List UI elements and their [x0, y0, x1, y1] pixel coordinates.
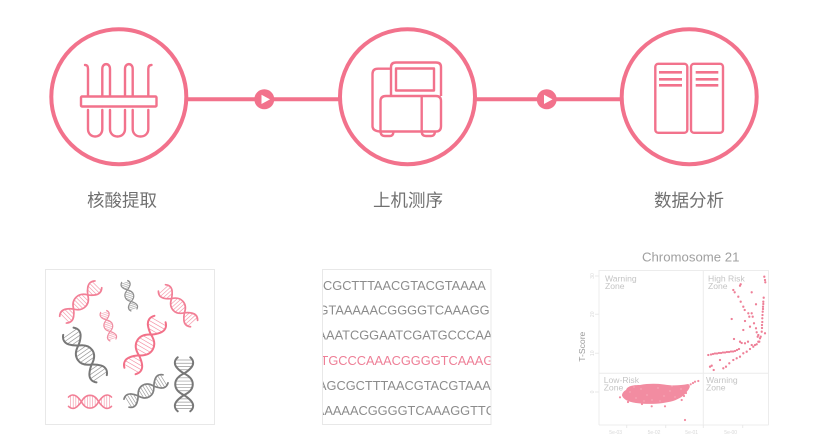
- chart frame and quadrant dividers: [599, 270, 768, 425]
- icon: test tubes in rack: [81, 64, 156, 136]
- connector line: sequencing to analysis: [475, 97, 622, 101]
- x axis tick labels: [609, 430, 737, 436]
- y axis title: T-Score: [577, 331, 587, 362]
- helix: pink upper right: [157, 283, 199, 328]
- x axis tick labels: 5e-02: [648, 430, 661, 436]
- panel: DNA sequence reads: [316, 270, 495, 424]
- step 1 label: 核酸提取: [87, 190, 157, 210]
- helix: gray small top: [120, 280, 138, 311]
- sequence text lines: AAATCGGAATCGATGCCCAA: [318, 328, 493, 342]
- play marker 2: [537, 89, 557, 109]
- sequence text lines: AGCGCTTTAACGTACGTAAA: [318, 378, 491, 393]
- low-risk point cloud: [620, 381, 698, 420]
- sequence text lines: [323, 281, 490, 415]
- x axis tick labels: 5e-01: [685, 430, 698, 436]
- chart title: Chromosome 21: [642, 250, 739, 264]
- zone label: low risk: Zone: [604, 382, 624, 392]
- zone label: high risk: Zone: [708, 281, 728, 291]
- scatter chart: T-score risk zones: [577, 270, 768, 436]
- zone label: warning bottom right: Zone: [706, 382, 726, 392]
- x axis tick labels: 5e-00: [724, 430, 737, 436]
- zone label: warning top left: Zone: [605, 281, 625, 291]
- icon: server racks: [655, 64, 723, 133]
- step 3 label: 数据分析: [654, 190, 724, 210]
- panel: DNA helices: [46, 270, 214, 424]
- zone label: warning top left: Warning: [605, 274, 637, 284]
- y axis tick labels: 10: [590, 350, 596, 356]
- step 3 circle: data analysis: [622, 29, 757, 164]
- helix: gray left: [61, 326, 109, 384]
- zone label: warning bottom right: Warning: [706, 375, 738, 385]
- sequence text lines: TGCCCAAACGGGGTCAAAG: [320, 353, 493, 368]
- sequence text lines: AAAAACGGGGTCAAAGGTTC: [316, 403, 495, 418]
- connector line: extraction to sequencing: [186, 97, 340, 101]
- helix: pink upper left: [58, 279, 103, 325]
- axis ticks: [595, 276, 743, 428]
- y axis tick labels: 20: [590, 311, 596, 317]
- y axis tick labels: 30: [590, 273, 596, 279]
- step 2 circle: sequencing: [340, 29, 475, 164]
- x axis tick labels: 5e-03: [609, 430, 622, 436]
- icon: sequencing instrument: [372, 62, 441, 136]
- zone label: low risk: Low-Risk: [604, 375, 640, 385]
- helix: pink centre: [122, 314, 168, 376]
- zone label: high risk: High Risk: [708, 274, 745, 284]
- high-risk points: [708, 277, 765, 370]
- helix: pink small: [99, 310, 117, 341]
- step 1 circle: nucleic acid extraction: [51, 29, 186, 164]
- y axis tick labels: 0: [590, 390, 596, 393]
- sequence text lines: CGCTTTAACGTACGTAAAA: [323, 278, 486, 293]
- helix: gray bottom: [123, 373, 169, 409]
- step 2 label: 上机测序: [373, 190, 443, 210]
- sequence text lines: GTAAAAACGGGGTCAAAGG: [318, 302, 490, 318]
- helix: gray right: [175, 357, 193, 411]
- y axis tick labels: [590, 273, 596, 393]
- helix: pink bottom: [68, 395, 112, 408]
- play marker 1: [254, 89, 274, 109]
